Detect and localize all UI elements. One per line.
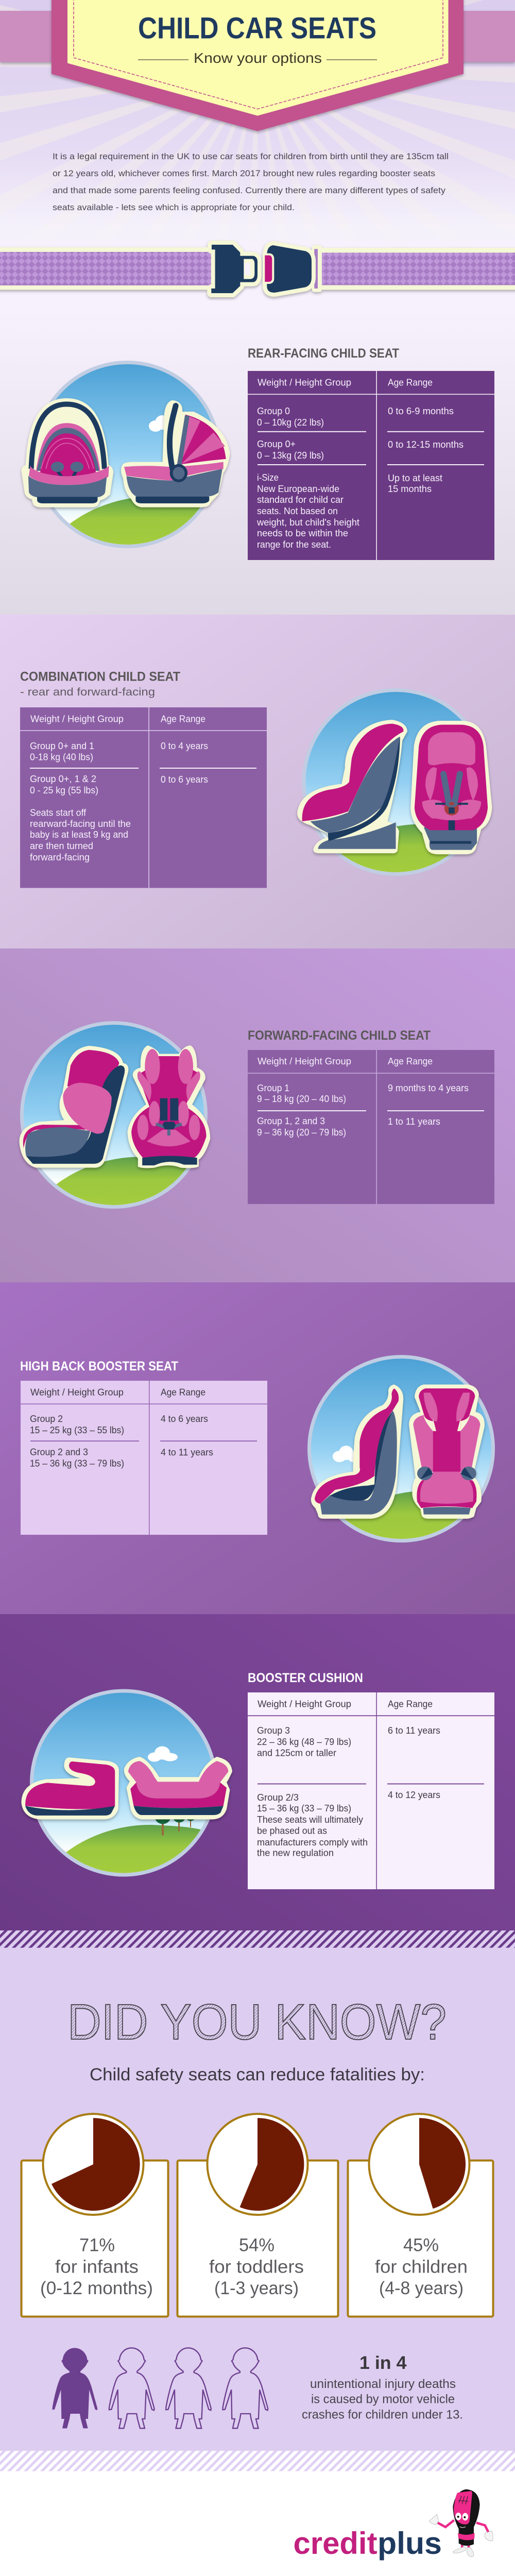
icon: combination seat, front view	[410, 721, 492, 854]
panel: high back booster seat	[20, 1357, 493, 1547]
subtitle: Know your options	[194, 50, 322, 66]
icon: forward-facing seat, side view	[19, 1046, 128, 1168]
background: high back booster section	[0, 1282, 515, 1614]
table	[248, 1050, 494, 1204]
card: 71% infants: for infants	[55, 2257, 139, 2277]
table: 0 – 10kg (22 lbs)	[257, 417, 324, 428]
statistic: 1 in 4: is caused by motor vehicle	[311, 2393, 455, 2406]
table: i-Size	[257, 472, 279, 483]
card: 45% children: 45%	[403, 2235, 439, 2256]
table: the new regulation	[257, 1848, 334, 1858]
statistic: 1 in 4	[302, 2353, 463, 2421]
icon: booster cushion, side view	[21, 1757, 119, 1819]
table: 15 – 25 kg (33 – 55 lbs)	[30, 1425, 124, 1435]
table: 0 to 4 years	[161, 741, 208, 751]
logo: creditplus: plus	[377, 2526, 442, 2561]
subheading: - rear and forward-facing	[20, 686, 155, 698]
table: weight, but child's height	[256, 517, 359, 528]
table: 4 to 11 years	[161, 1447, 213, 1458]
table: Weight / Height Group	[258, 1699, 351, 1709]
logo: creditplus: credit	[294, 2526, 377, 2561]
intro paragraph: seats available - lets see which is appropriate for your child.	[53, 202, 295, 212]
table: are then turned	[30, 841, 93, 851]
panel: booster cushion	[21, 1671, 494, 1889]
table: 4 to 6 years	[161, 1414, 208, 1424]
background: combination section	[0, 615, 515, 948]
intro paragraph: It is a legal requirement in the UK to use car seats for children from birth until they are 135cm tall	[53, 151, 449, 161]
illustration: sky scene	[35, 363, 219, 552]
table: Group 0	[257, 406, 290, 416]
heading: did you know: DID YOU KNOW?	[67, 1994, 447, 2050]
background: forward-facing section	[0, 948, 515, 1282]
pie chart: 45%	[369, 2114, 470, 2215]
title banner	[52, 0, 464, 131]
table	[20, 707, 267, 888]
table: 22 – 36 kg (48 – 79 lbs)	[257, 1737, 351, 1747]
card: 71% infants: (0-12 months)	[40, 2278, 153, 2298]
card: 45% children: (4-8 years)	[379, 2278, 464, 2298]
panel: combination child seat	[20, 670, 492, 888]
table: standard for child car	[257, 495, 344, 505]
table: Weight / Height Group	[30, 714, 124, 724]
table: Group 3	[257, 1725, 290, 1736]
table: 0 to 6 years	[161, 774, 208, 785]
table: forward-facing	[30, 852, 90, 862]
background: booster cushion section	[0, 1614, 515, 1930]
table: seats. Not based on	[257, 506, 338, 516]
table: 0 – 13kg (29 lbs)	[257, 450, 324, 461]
table: Age Range	[161, 714, 205, 724]
table: 0 - 25 kg (55 lbs)	[30, 785, 98, 795]
heading: HIGH BACK BOOSTER SEAT	[20, 1359, 178, 1374]
panel: did you know	[22, 1994, 493, 2428]
pie chart: 71%	[43, 2114, 143, 2215]
pie chart: 54%	[207, 2114, 308, 2215]
illustration: sky scene	[22, 1023, 206, 1213]
table: Group 2/3	[257, 1792, 299, 1803]
subheading: Child safety seats can reduce fatalities by:	[90, 2065, 425, 2084]
heading: BOOSTER CUSHION	[248, 1671, 363, 1685]
illustration: sky scene	[309, 1357, 493, 1547]
table	[248, 1692, 494, 1889]
table: 9 – 18 kg (20 – 40 lbs)	[257, 1094, 346, 1104]
icon: forward-facing seat, front view	[127, 1045, 210, 1168]
striped divider	[0, 1930, 515, 1947]
statistic: 1 in 4: crashes for children under 13.	[302, 2408, 463, 2421]
table: 4 to 12 years	[388, 1790, 440, 1800]
table: Age Range	[388, 377, 433, 387]
striped footer divider	[0, 2451, 515, 2471]
card: 54% toddlers: (1-3 years)	[214, 2278, 299, 2298]
illustration: sky scene	[304, 690, 488, 880]
table: and 125cm or taller	[257, 1748, 336, 1758]
icon: high back booster, front view	[409, 1384, 485, 1519]
table	[248, 371, 494, 560]
table: Age Range	[388, 1699, 433, 1709]
statistic: 1 in 4: unintentional injury deaths	[310, 2377, 456, 2391]
icon: combination seat, side view	[297, 720, 407, 853]
background: sun rays	[0, 0, 515, 158]
table: 1 to 11 years	[388, 1116, 440, 1127]
table	[21, 1381, 267, 1535]
statistic: 1 in 4: 1 in 4	[359, 2353, 407, 2373]
table: be phased out as	[257, 1826, 327, 1836]
table: baby is at least 9 kg and	[30, 829, 128, 840]
logo: creditplus	[294, 2526, 442, 2561]
heading: FORWARD-FACING CHILD SEAT	[248, 1028, 431, 1043]
illustration: sky scene	[32, 1691, 215, 1880]
card: 71% infants	[22, 2114, 168, 2316]
table: Age Range	[388, 1056, 433, 1066]
table: 15 months	[388, 484, 432, 494]
table: 9 – 36 kg (20 – 79 lbs)	[257, 1127, 346, 1138]
intro paragraph	[53, 151, 449, 212]
table: 0 to 12-15 months	[388, 439, 464, 450]
card: 45% children: for children	[375, 2257, 468, 2277]
table: 0-18 kg (40 lbs)	[30, 752, 93, 762]
table: Group 0+ and 1	[30, 741, 94, 751]
table: rearward-facing until the	[30, 819, 131, 829]
icon: high back booster, side view	[311, 1384, 403, 1519]
table: 9 months to 4 years	[388, 1083, 469, 1093]
table: These seats will ultimately	[257, 1815, 363, 1825]
intro paragraph: and that made some parents feeling confused. Currently there are many different types of safety	[53, 185, 446, 195]
card: 45% children	[348, 2114, 493, 2316]
heading: REAR-FACING CHILD SEAT	[248, 346, 399, 361]
table: Group 1, 2 and 3	[257, 1116, 325, 1126]
table: 6 to 11 years	[388, 1725, 440, 1736]
table: 15 – 36 kg (33 – 79 lbs)	[257, 1803, 351, 1814]
table: 15 – 36 kg (33 – 79 lbs)	[30, 1459, 124, 1469]
table: range for the seat.	[257, 539, 331, 550]
card: 71% infants: 71%	[79, 2235, 115, 2256]
table: Group 0+	[257, 439, 296, 449]
icon: gear stick mascot	[429, 2489, 493, 2557]
table: Seats start off	[30, 808, 87, 818]
table: New European-wide	[257, 484, 339, 494]
panel: rear-facing child seat	[21, 346, 494, 560]
icon: booster cushion, front view	[124, 1757, 232, 1819]
table: Up to at least	[388, 473, 442, 483]
top ribbon band	[0, 11, 515, 62]
card: 54% toddlers	[177, 2114, 338, 2316]
background: top gradient	[0, 0, 515, 615]
title: CHILD CAR SEATS	[138, 12, 376, 45]
card: 54% toddlers: 54%	[239, 2235, 274, 2256]
table: Group 2 and 3	[30, 1447, 88, 1458]
icon: buckle	[211, 245, 322, 293]
table: needs to be within the	[257, 528, 348, 538]
table: Weight / Height Group	[258, 1056, 351, 1066]
icon: rear-facing seat, side view	[121, 400, 230, 507]
icon: row of four children	[53, 2348, 268, 2428]
icon: rear-facing seat, front view	[21, 398, 113, 507]
card: 54% toddlers: for toddlers	[209, 2257, 304, 2277]
background: did you know section	[0, 1947, 515, 2451]
table: Group 0+, 1 & 2	[30, 774, 96, 784]
table: Weight / Height Group	[258, 377, 351, 387]
table: manufacturers comply with	[257, 1837, 368, 1848]
table: Weight / Height Group	[30, 1387, 124, 1397]
table: Age Range	[161, 1387, 205, 1397]
table: 0 to 6-9 months	[388, 406, 454, 416]
table: Group 1	[257, 1083, 289, 1093]
table: Group 2	[30, 1414, 63, 1424]
intro paragraph: or 12 years old, whichever comes first. March 2017 brought new rules regarding booster seats	[53, 168, 435, 178]
seat belt divider	[0, 245, 515, 293]
heading: COMBINATION CHILD SEAT	[20, 670, 180, 684]
panel: forward-facing child seat	[19, 1023, 494, 1213]
